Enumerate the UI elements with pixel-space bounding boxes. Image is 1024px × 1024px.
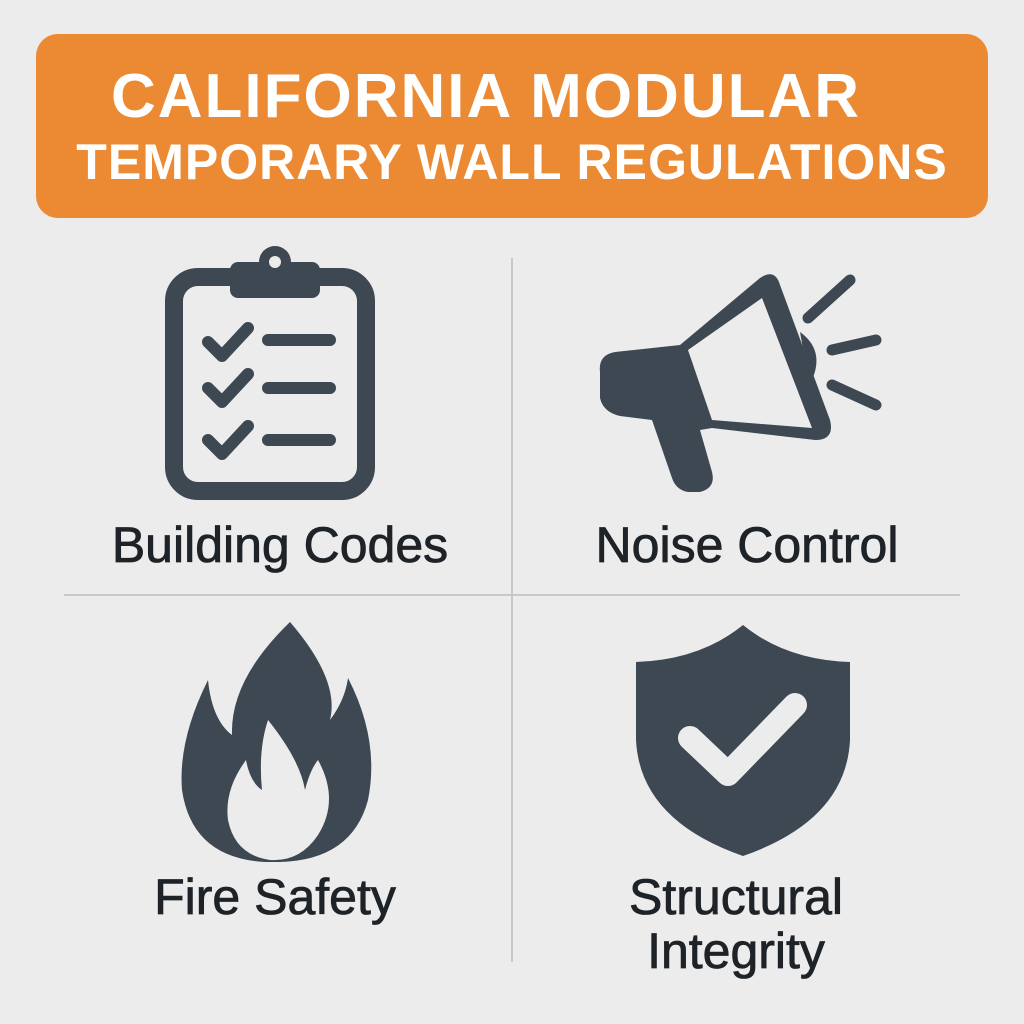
label: Structural Integrity: Structural bbox=[629, 869, 843, 925]
title banner bbox=[36, 34, 988, 218]
title line 2: TEMPORARY WALL REGULATIONS bbox=[76, 134, 948, 190]
label: Noise Control: Noise Control bbox=[596, 517, 898, 573]
icon: shield check bbox=[636, 625, 850, 856]
label: Fire Safety: Fire Safety bbox=[154, 869, 396, 925]
title line 1: CALIFORNIA MODULAR bbox=[111, 62, 861, 131]
icon: flame bbox=[182, 622, 371, 862]
label: Structural Integrity bbox=[629, 869, 843, 979]
icon: clipboard bbox=[174, 246, 366, 491]
icon: megaphone bbox=[600, 274, 876, 492]
label: Structural Integrity: Integrity bbox=[647, 923, 825, 979]
label: Building Codes: Building Codes bbox=[112, 517, 448, 573]
